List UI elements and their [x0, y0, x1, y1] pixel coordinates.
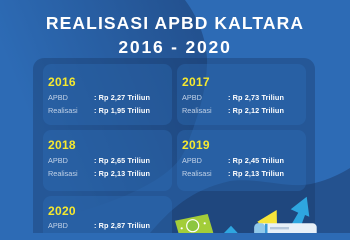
card 2019: : Rp 2,13 Triliun: [228, 169, 284, 178]
card 2020: : Rp 2,87 Triliun: [94, 221, 150, 230]
card 2017: : Rp 2,73 Triliun: [228, 92, 284, 102]
illustration: money and charts: [175, 196, 317, 233]
card 2016: : Rp 2,27 Triliun: [94, 92, 150, 102]
card 2020: 2020: [48, 204, 76, 218]
card 2019: 2019: [182, 138, 210, 152]
card 2018: 2018: [48, 138, 76, 152]
icon: banknote: [175, 214, 213, 233]
data panel: [33, 58, 315, 233]
card 2016: : Rp 1,95 Triliun: [94, 106, 150, 114]
card 2020: APBD: [48, 221, 68, 230]
card 2016: 2016: [48, 75, 76, 89]
card 2016: APBD: [48, 92, 68, 102]
card 2018: [43, 130, 172, 191]
card 2019: APBD: [182, 156, 202, 165]
card 2019: [177, 130, 306, 191]
icon: blue arrow left: [224, 226, 238, 233]
card 2017: 2017: [182, 75, 210, 89]
subtitle years: 2016 - 2020: [118, 36, 232, 56]
card 2016: [43, 64, 172, 125]
card 2019: : Rp 2,45 Triliun: [228, 156, 284, 165]
icon: paper scroll: [254, 223, 317, 237]
card 2017: [177, 64, 306, 125]
card 2016: Realisasi: [48, 106, 78, 114]
card 2017: : Rp 2,12 Triliun: [228, 106, 284, 114]
card 2017: APBD: [182, 92, 202, 102]
card 2019: Realisasi: [182, 169, 212, 178]
icon: blue arrow up: [291, 197, 309, 224]
card 2018: : Rp 2,65 Triliun: [94, 156, 150, 165]
card 2020: [43, 196, 172, 233]
title: REALISASI APBD KALTARA: [46, 13, 304, 33]
card 2018: APBD: [48, 156, 68, 165]
card 2018: : Rp 2,13 Triliun: [94, 169, 150, 178]
icon: yellow triangle: [257, 210, 277, 226]
card 2017: Realisasi: [182, 106, 212, 114]
card 2018: Realisasi: [48, 169, 78, 178]
